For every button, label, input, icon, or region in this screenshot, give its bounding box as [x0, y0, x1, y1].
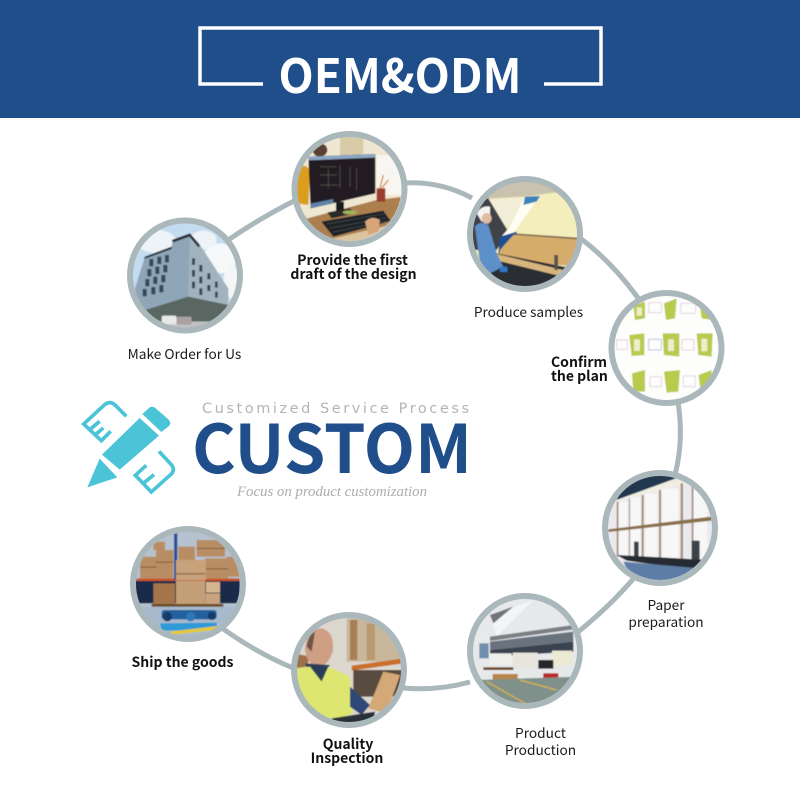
ring — [294, 615, 404, 725]
step: make order — [128, 220, 241, 363]
label: Produce samples — [474, 301, 583, 321]
label — [628, 594, 704, 631]
step: confirm plan — [551, 293, 722, 403]
step: ship goods — [132, 529, 243, 672]
ring — [130, 220, 240, 330]
label — [290, 250, 417, 284]
label: Quality — [323, 734, 373, 754]
photo: factory building — [133, 224, 237, 328]
photo: box templates — [616, 298, 714, 394]
ring — [470, 596, 580, 706]
photo: design workstation — [295, 135, 403, 245]
center logo block — [84, 396, 472, 500]
step: first draft — [290, 134, 417, 284]
photo: inspector with box — [295, 617, 403, 727]
label — [311, 734, 383, 768]
photo: warehouse pallets — [136, 532, 240, 636]
icon: pencil and rulers — [84, 403, 173, 492]
ring — [294, 134, 404, 244]
label: preparation — [628, 611, 704, 631]
wordmark: CUSTOM — [192, 396, 472, 493]
step: produce samples — [470, 179, 583, 321]
ring — [133, 529, 243, 639]
label: Production — [505, 739, 576, 759]
label: Paper — [647, 594, 685, 614]
ring — [612, 293, 722, 403]
label: Provide the first — [297, 250, 408, 270]
tagline: Focus on product customization — [236, 484, 427, 500]
step: product production — [470, 596, 580, 759]
label: Make Order for Us — [128, 343, 241, 363]
photo: sample machine — [473, 182, 577, 286]
title: OEM&ODM — [278, 38, 522, 107]
step: quality inspection — [294, 615, 404, 768]
header band — [0, 0, 800, 118]
process connector ring — [222, 183, 680, 689]
label: Product — [515, 722, 566, 742]
ring — [470, 179, 580, 289]
label — [551, 352, 608, 386]
step: paper preparation — [605, 473, 715, 631]
label: the plan — [551, 366, 608, 386]
ring — [605, 473, 715, 583]
photo: paper stacks — [608, 476, 712, 580]
label: Confirm — [551, 352, 607, 372]
label: Inspection — [311, 748, 383, 768]
subtitle: Customized Service Process — [202, 401, 469, 417]
label — [505, 722, 576, 759]
photo: production line — [473, 599, 577, 703]
label: draft of the design — [290, 264, 417, 284]
label: Ship the goods — [132, 652, 234, 672]
